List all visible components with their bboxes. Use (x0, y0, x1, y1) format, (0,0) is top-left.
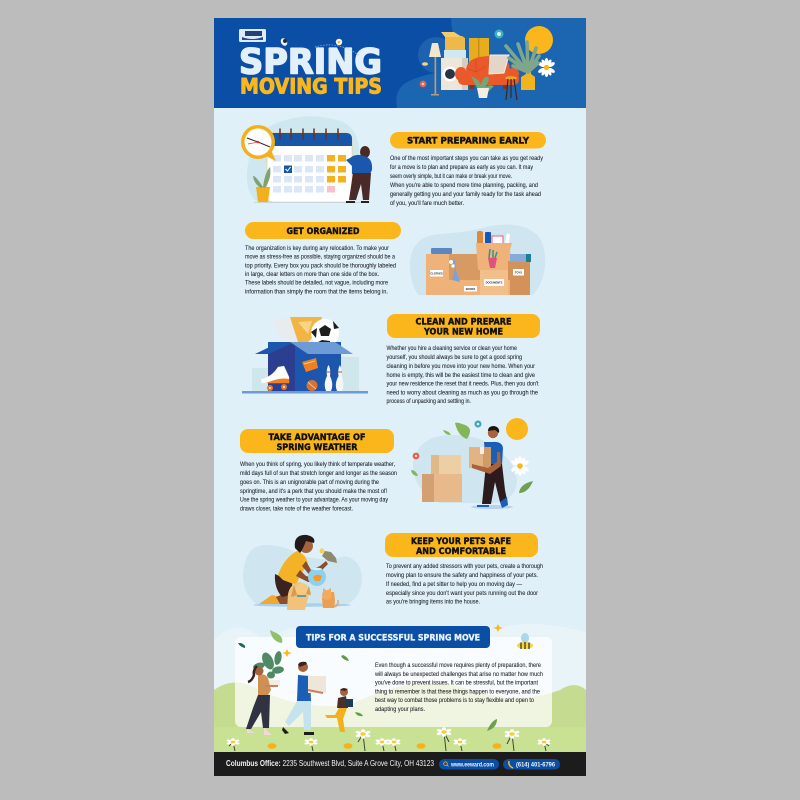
illustration: family moving (238, 624, 503, 735)
footer bar (214, 752, 586, 776)
heading pill: TAKE ADVANTAGE OF (268, 433, 366, 443)
logo (239, 29, 266, 42)
phone pill: (614) 401-6796 (516, 762, 556, 768)
text block: seem overly simple, but it can make or break your move. (390, 173, 512, 180)
title: moving tips: MOVING TIPS (240, 74, 382, 100)
website pill (439, 759, 499, 770)
heading pill (385, 533, 538, 557)
heading pill (387, 314, 540, 338)
heading pill: TIPS FOR A SUCCESSFUL SPRING MOVE (306, 634, 480, 644)
title: spring: SPRING (239, 42, 382, 82)
illustration: labeled boxes: BOOKS (466, 287, 476, 291)
text block: of you, you'll fare much better. (390, 200, 464, 207)
heading pill: KEEP YOUR PETS SAFE (411, 537, 511, 547)
text block: home is empty, this will be the easiest time to clean and give (386, 372, 535, 379)
text block (245, 245, 396, 296)
section: keep your pets safe (243, 533, 543, 610)
text block: will always be unexpected challenges that arise no matter how much (374, 671, 543, 678)
text block: springtime, and it's a perk that you should make the most of! (240, 488, 387, 495)
heading pill: GET ORGANIZED (286, 227, 360, 237)
section: clean and prepare your new home (242, 314, 540, 405)
illustration: man carrying box (411, 418, 533, 509)
text block: your new residence the reset that it needs. Plus, then you don't (386, 380, 539, 388)
panel: tips card (235, 637, 552, 727)
text block: The organization is key during any relocation. To make your (245, 245, 390, 252)
section: start preparing early (241, 116, 546, 207)
text block: These labels should be detailed, not vague, including more (245, 280, 388, 286)
text block: move as stress-free as possible, staying organized should be a (245, 254, 395, 260)
heading pill (390, 132, 546, 148)
illustration: furniture pile (420, 26, 556, 100)
text block: process of unpacking and settling in. (386, 398, 471, 405)
illustration: labeled boxes: CLOTHES (430, 272, 443, 276)
section: take advantage of spring weather (240, 418, 533, 512)
section: get organized (245, 222, 545, 296)
illustration: calendar with clock and woman (241, 116, 372, 203)
text block: When you think of spring, you likely think of temperate weather, (240, 461, 395, 468)
text block: need to worry about cleaning as much as you go through the (386, 390, 538, 396)
text block: top priority. Every box you pack should be thoroughly labeled (245, 262, 396, 270)
heading pill: CLEAN AND PREPARE (416, 318, 512, 328)
flowers on meadow (226, 727, 551, 751)
text block: you've done to prevent issues. It can be stressful, but the important (375, 680, 538, 686)
landscape: hills and grass (214, 682, 586, 752)
text block: thing to remember is that these things happen to everyone, and the (375, 688, 540, 696)
text block: for a move is to plan and prepare as early as you can. It may (390, 164, 534, 171)
section: tips for a successful spring move (214, 624, 586, 752)
text block (374, 662, 543, 713)
panel: poster background (214, 18, 586, 776)
text block: Whether you hire a cleaning service or clean your home (386, 345, 517, 352)
illustration: labeled boxes: DOCUMENTS (486, 280, 503, 284)
text block: best way to combat those problems is to stay flexible and open to (375, 697, 534, 704)
icon: bee and flower (279, 37, 360, 56)
heading pill (296, 626, 490, 648)
text block: mild days full of sun that stretch longer and longer as the season (240, 470, 397, 477)
heading pill: START PREPARING EARLY (407, 136, 530, 146)
heading pill: SPRING WEATHER (276, 443, 358, 453)
text block: adapting your plans. (375, 706, 425, 713)
text block: especially since you don't want your pets running out the door (386, 590, 539, 597)
text block: cleaning in before you move into your new home. When your (386, 363, 536, 370)
text block: moving plan to ensure the safety and happiness of your pets. (386, 572, 538, 579)
text block: generally getting you and your family ready for the task ahead (390, 191, 541, 198)
website pill: www.eeward.com (450, 762, 494, 768)
text block: Use the spring weather to your advantage. As your moving day (240, 496, 389, 504)
text block: To prevent any added stressors with your pets, create a thorough (386, 563, 543, 570)
phone pill (503, 759, 560, 770)
illustration: blue box of sports gear (242, 316, 368, 394)
text block (386, 563, 543, 606)
text block: in large, clear letters on more than one side of the box. (245, 271, 379, 278)
text block: When you're able to spend more time planning, packing, and (390, 182, 538, 189)
text block: Even though a successful move requires plenty of preparation, there (375, 662, 541, 669)
heading pill: YOUR NEW HOME (423, 328, 503, 338)
text block: information than simply the room that the items belong in. (245, 288, 388, 296)
text block: yourself, you should always be sure to get a good spring (386, 354, 522, 361)
text block: as you're bringing items into the house. (386, 598, 480, 606)
text block (240, 461, 397, 512)
heading pill (240, 429, 394, 453)
illustration: woman with pets (243, 535, 362, 610)
text block (390, 155, 544, 207)
text block: goes on. This is an unignorable part of moving during the (240, 479, 379, 486)
heading pill: AND COMFORTABLE (416, 547, 506, 557)
illustration: labeled boxes (410, 225, 545, 295)
heading pill (245, 222, 401, 239)
office address: Columbus Office: 2235 Southwest Blvd, Suite A Grove City, OH 43123 (226, 759, 434, 768)
icon: bee (517, 633, 533, 649)
text block: If needed, find a pet sitter to help you on moving day — (386, 581, 523, 588)
text block: One of the most important steps you can take as you get ready (390, 155, 544, 162)
text block (386, 345, 539, 405)
panel: header banner (214, 18, 586, 108)
text block: draws closer, take note of the weather forecast. (240, 506, 353, 512)
illustration: labeled boxes: TOYS (515, 270, 522, 274)
